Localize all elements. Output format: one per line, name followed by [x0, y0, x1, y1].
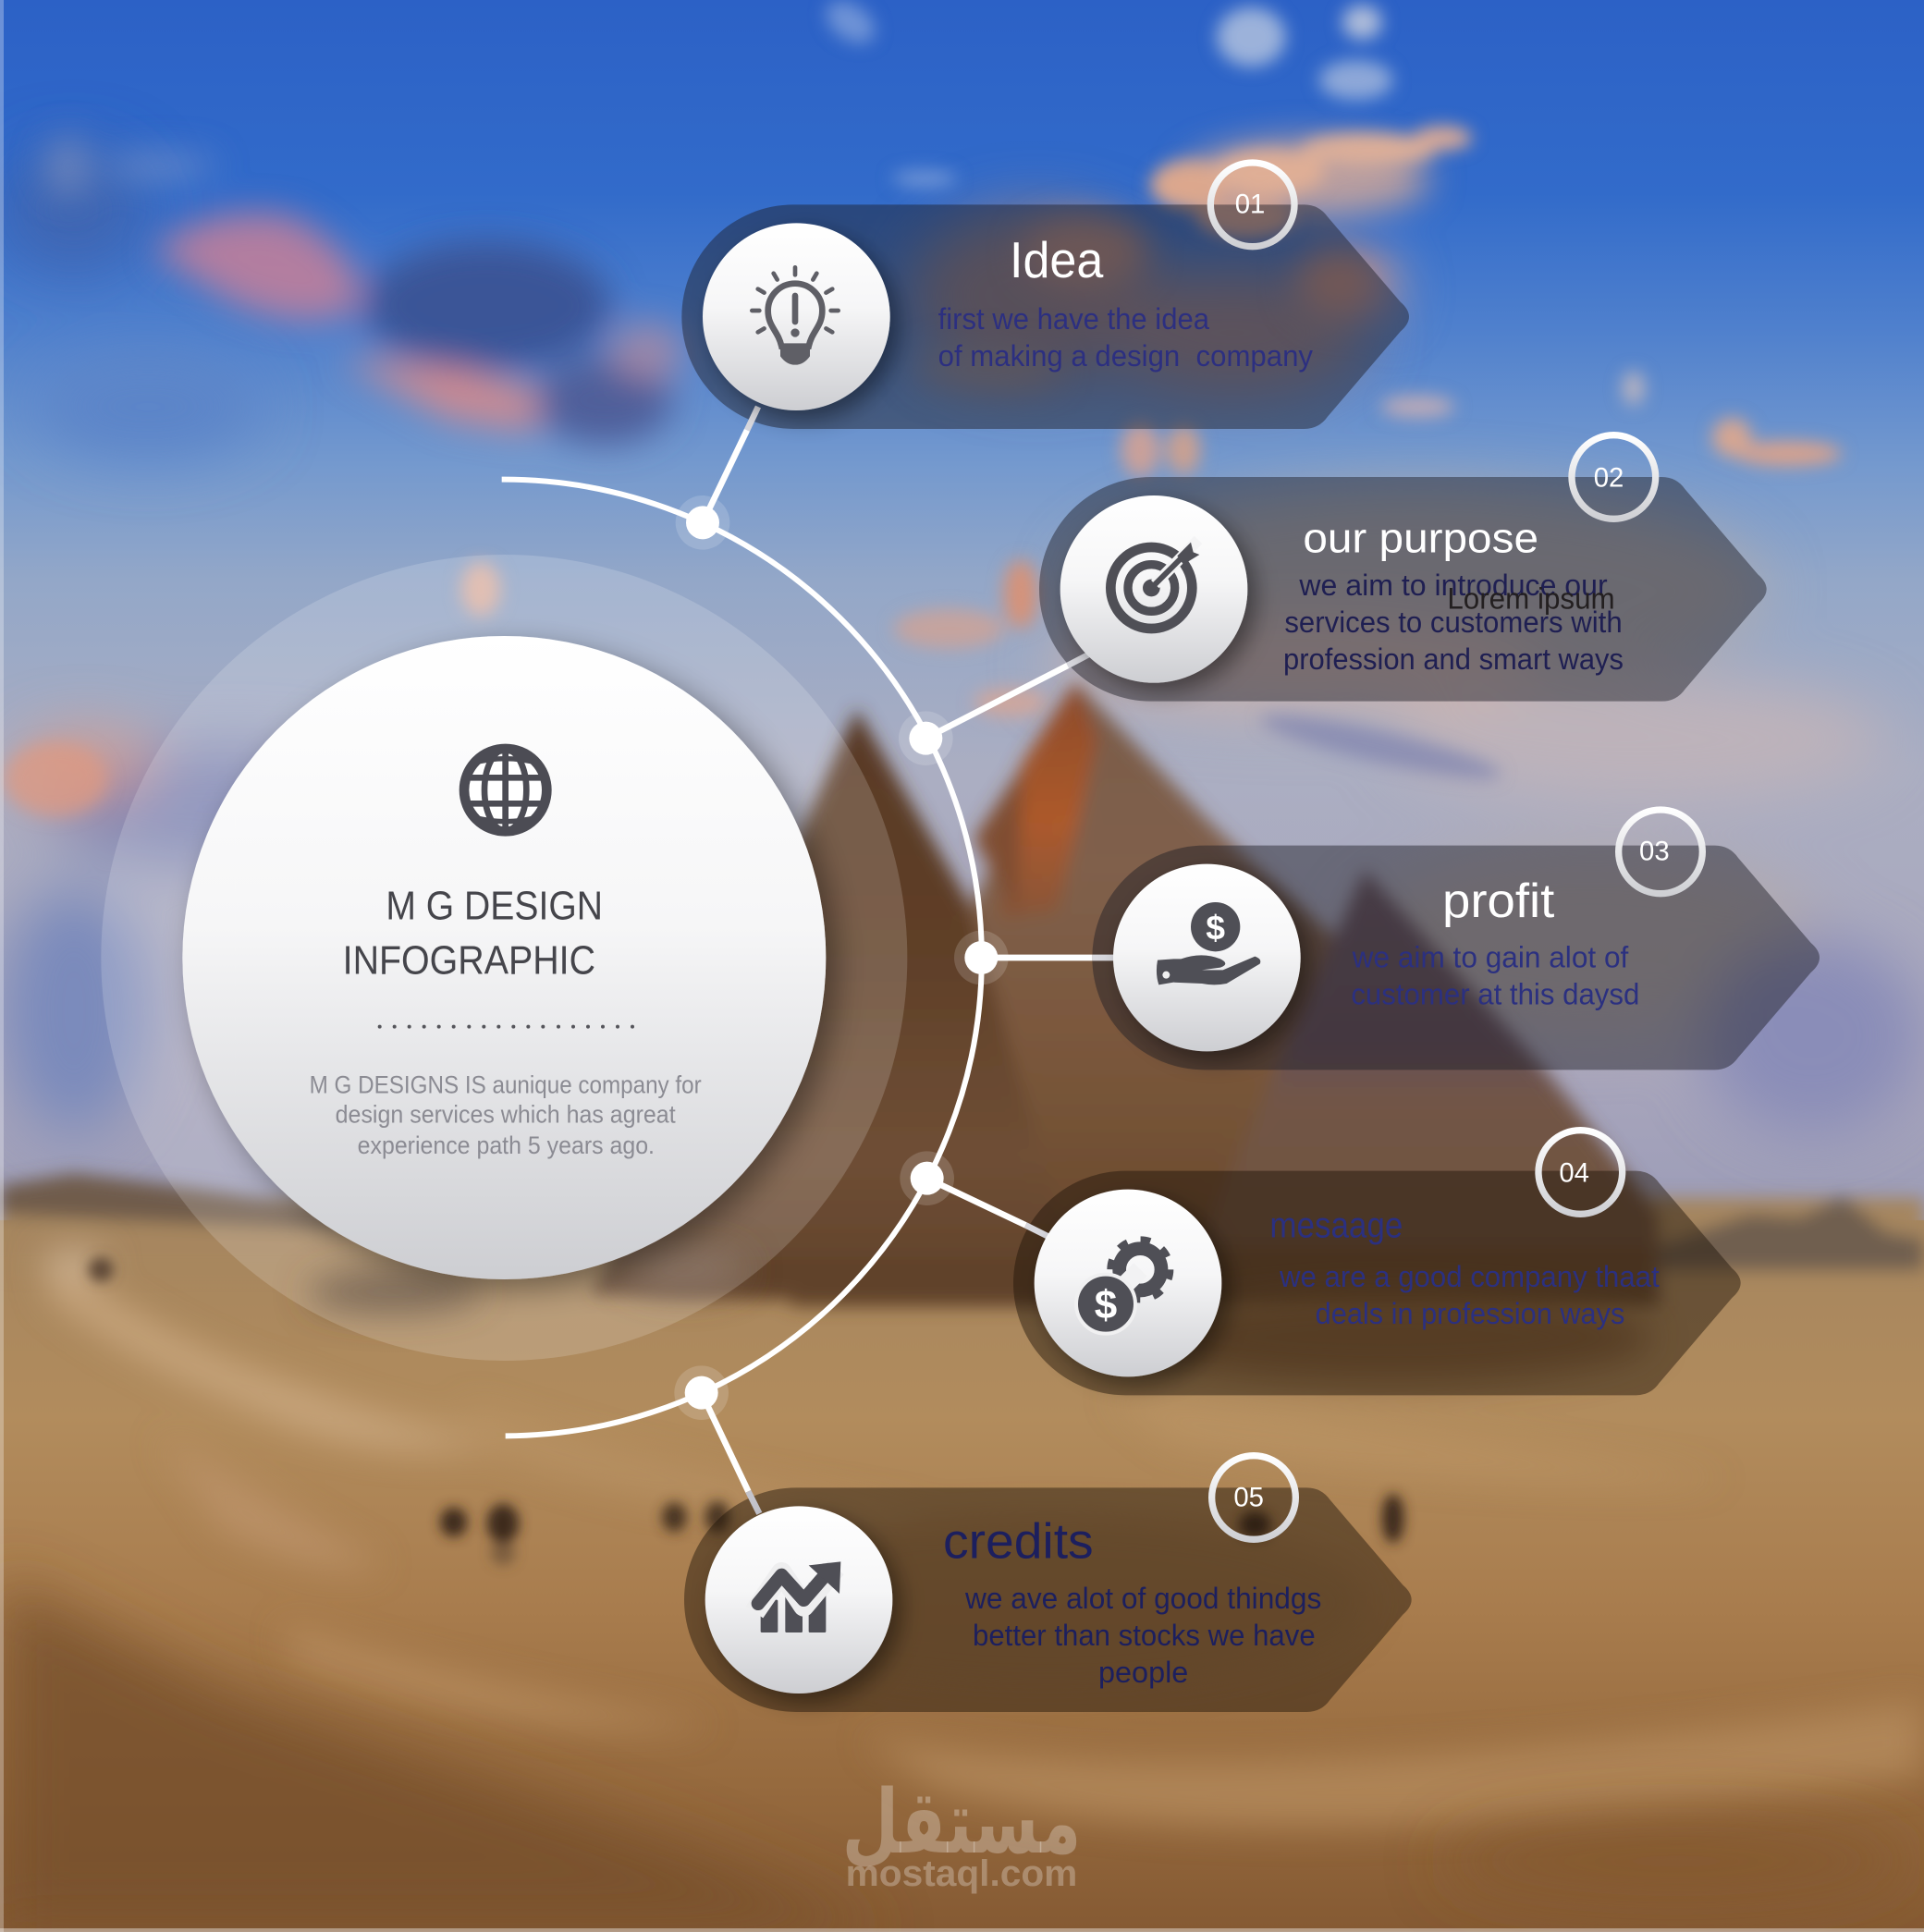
icon: light bulb	[752, 267, 839, 365]
text: company description: design services which has agreat	[336, 1101, 676, 1129]
text: step 02 description: we aim to introduce our	[1298, 569, 1608, 602]
arc connecting the five nodes	[502, 480, 982, 1436]
text: step 01 description	[938, 302, 1313, 373]
panel: translucent halo behind central circle	[101, 555, 907, 1361]
text: company description: M G DESIGNS IS aunique company for	[310, 1071, 702, 1099]
text: step 05 description: we ave alot of good thindgs	[964, 1582, 1321, 1615]
title: our purpose: our purpose	[1303, 514, 1538, 561]
title: profit: profit	[1442, 874, 1555, 928]
icon: target with arrow	[1110, 540, 1199, 629]
icon: hand holding coin	[1157, 902, 1260, 984]
text: step 02 description: profession and smart ways	[1283, 642, 1624, 676]
icon: hand holding coin: $	[1206, 908, 1225, 947]
panel: central white circle	[182, 636, 826, 1279]
heading: M G DESIGN INFOGRAPHIC: INFOGRAPHIC	[343, 937, 595, 983]
text: step 04 description: deals in profession ways	[1316, 1297, 1624, 1330]
badge: 04: 04	[1559, 1158, 1589, 1189]
text: step 03 description: we aim to gain alot of	[1352, 941, 1628, 974]
badge: 02: 02	[1594, 463, 1624, 494]
node: connector dot 3	[954, 931, 1009, 984]
badge: 05: 05	[1233, 1482, 1264, 1512]
panel: step 03 profit	[981, 810, 1820, 1070]
heading: M G DESIGN INFOGRAPHIC: M G DESIGN	[386, 884, 603, 929]
badge: 04	[1538, 1131, 1623, 1214]
badge: 03: 03	[1639, 837, 1670, 867]
title: Idea: Idea	[1010, 232, 1104, 288]
node: connector dot 5	[674, 1365, 729, 1420]
node: connector dot 2	[899, 711, 953, 765]
node: connector dot 1	[676, 495, 729, 550]
text: step 04 description: we are a good company thaat	[1279, 1260, 1660, 1293]
icon: gear and dollar coin	[1076, 1240, 1170, 1334]
icon: gear and dollar coin: $	[1095, 1283, 1117, 1328]
badge: 03	[1619, 810, 1702, 894]
panel: step 04 message	[927, 1131, 1741, 1395]
text: step 01 description: first we have the idea	[938, 302, 1209, 336]
text: step 05 description: better than stocks we have	[973, 1619, 1316, 1652]
badge: 02	[1572, 435, 1656, 519]
dotted divider	[378, 1025, 634, 1029]
badge: 01: 01	[1235, 190, 1265, 220]
text: step 04 description	[1279, 1260, 1660, 1330]
icon: rising bar chart	[754, 1561, 840, 1632]
title: mesaage: mesaage	[1269, 1206, 1403, 1246]
text: step 03 description	[1351, 941, 1639, 1011]
text: step 05 description: people	[1098, 1656, 1188, 1689]
watermark: mostaql: mostaql.com	[846, 1853, 1077, 1894]
text: step 02 description: services to customers with	[1284, 605, 1623, 639]
badge: 01	[1210, 163, 1294, 247]
text: company description	[310, 1071, 702, 1159]
text: step 01 description: of making a design company	[938, 339, 1313, 373]
text: step 05 description	[964, 1582, 1321, 1689]
text: step 03 description: customer at this daysd	[1351, 978, 1639, 1011]
panel: step 02 our purpose	[925, 435, 1767, 739]
heading: M G DESIGN INFOGRAPHIC	[343, 884, 603, 983]
text: step 02 description	[1283, 569, 1624, 676]
panel: step 01 idea	[681, 163, 1409, 522]
text: company description: experience path 5 years ago.	[358, 1131, 655, 1159]
node: connector dot 4	[900, 1151, 954, 1205]
title: credits: credits	[943, 1514, 1094, 1569]
icon: globe	[464, 749, 546, 831]
watermark: mostaql: مستقل	[842, 1770, 1081, 1874]
panel: step 05 credits	[684, 1393, 1412, 1712]
text: Lorem ipsum overlay: Lorem ipsum	[1447, 582, 1615, 616]
badge: 05	[1212, 1456, 1295, 1539]
